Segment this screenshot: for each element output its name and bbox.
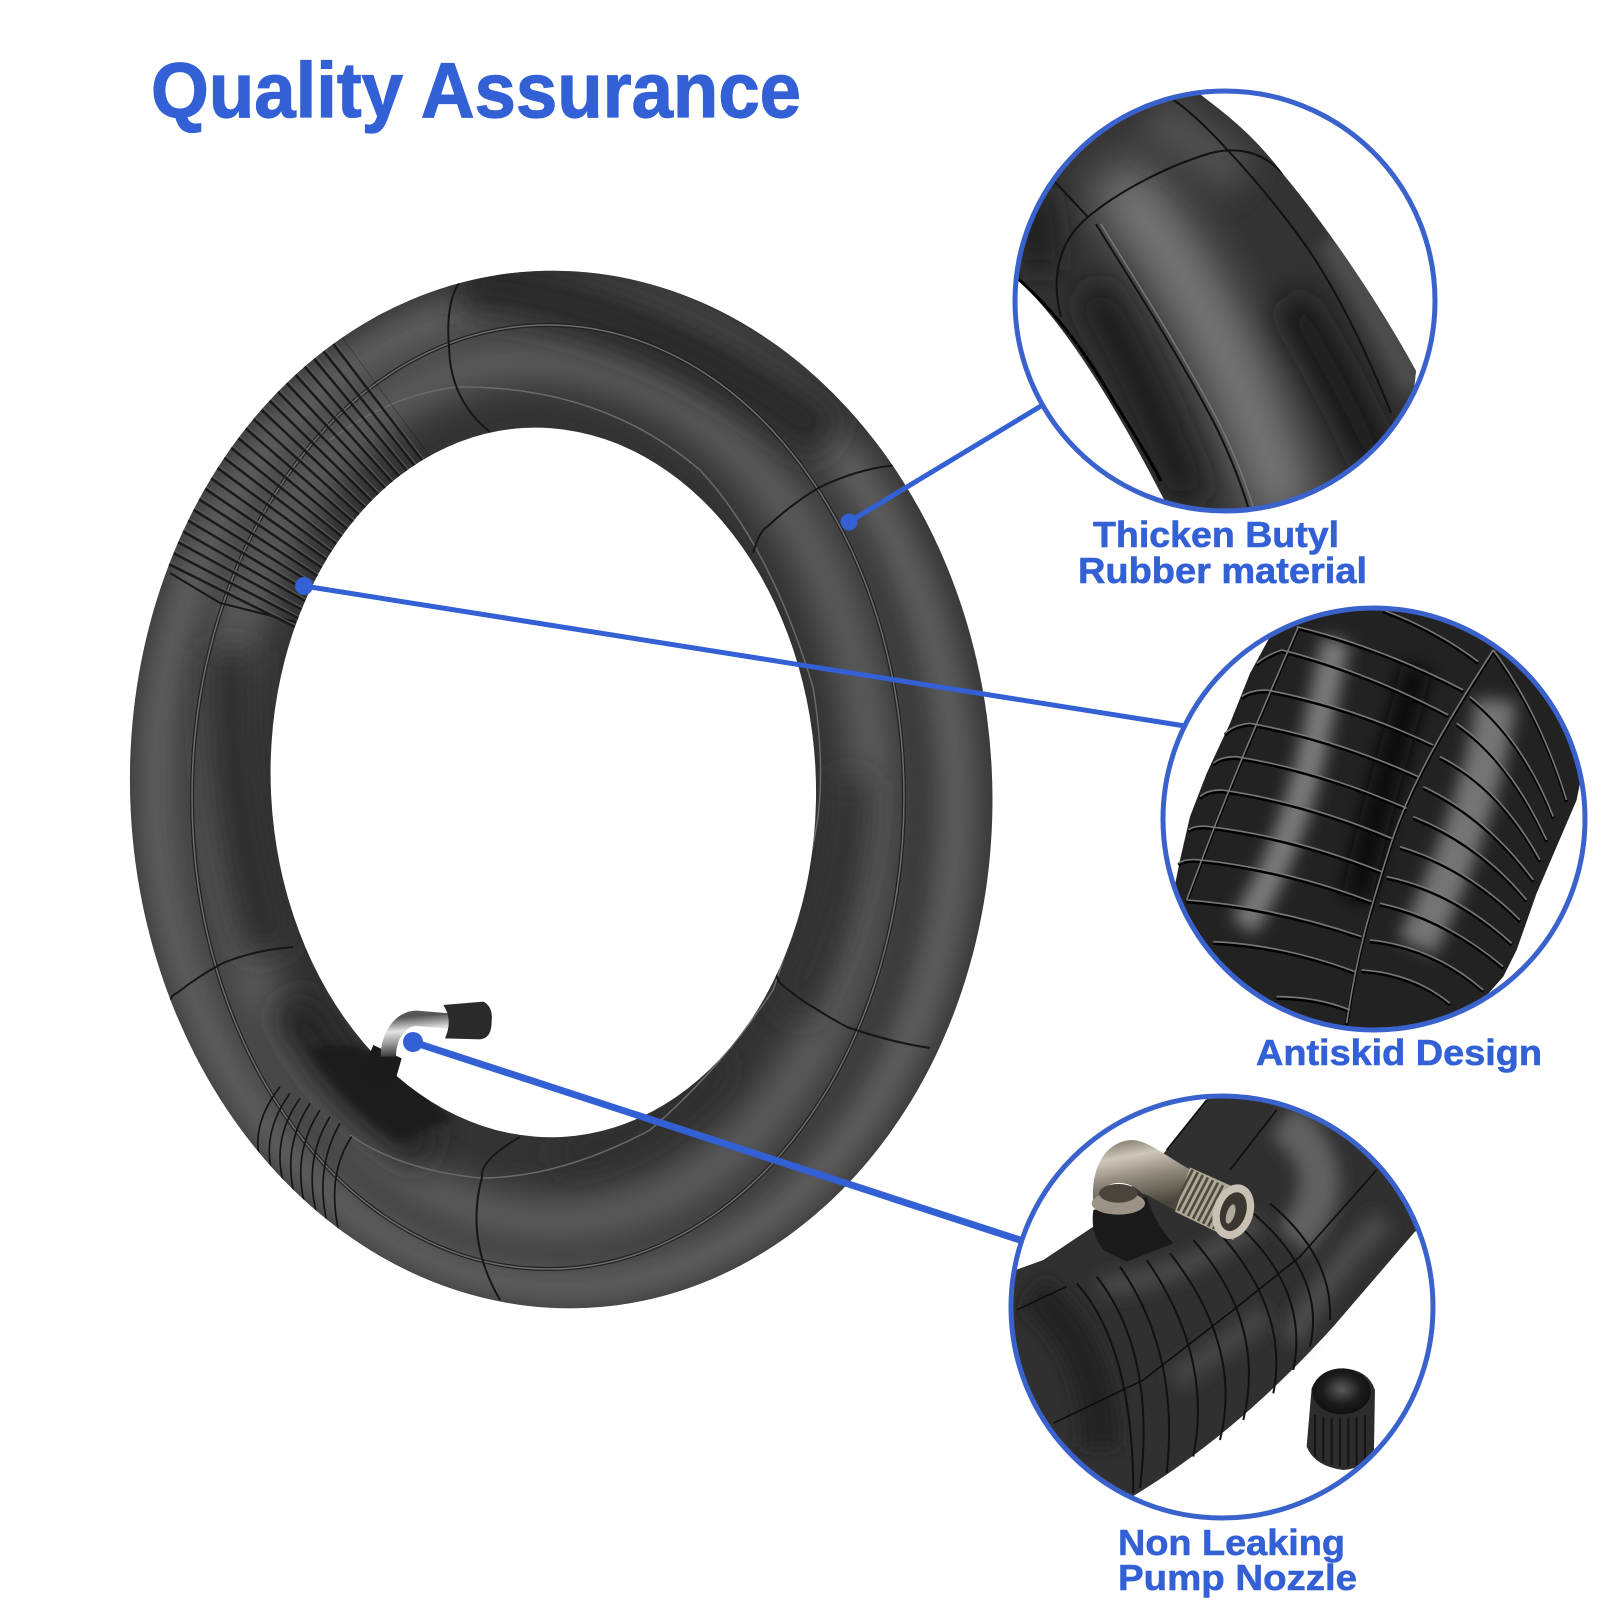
ring outline (1163, 608, 1585, 1030)
lower-left antiskid ribs (258, 1087, 352, 1237)
label: thicken butyl rubber (1078, 514, 1367, 591)
valve threads (1175, 1168, 1234, 1240)
callout dot: antiskid (295, 577, 313, 595)
upper-left antiskid ribs (232, 405, 392, 597)
callout line: rubber material (849, 406, 1041, 522)
valve patch (310, 1044, 450, 1140)
valve cap (1307, 1368, 1375, 1470)
detail circle: antiskid ribs (1163, 597, 1585, 1040)
cross seams (167, 278, 930, 1300)
label: non leaking pump nozzle: Non Leaking (1118, 1522, 1345, 1563)
label: thicken butyl rubber: Thicken Butyl (1093, 514, 1339, 555)
inner tube product photo (100, 250, 1020, 1330)
label: thicken butyl rubber: Rubber material (1078, 550, 1367, 591)
valve base (1093, 1197, 1173, 1262)
valve bend (1093, 1140, 1190, 1212)
zoomed tube (1014, 1098, 1416, 1496)
label: non leaking pump nozzle (1118, 1522, 1357, 1598)
valve stem (360, 1002, 492, 1088)
ring outline (1015, 91, 1435, 511)
callout dot: nozzle (403, 1032, 423, 1052)
callout line: nozzle (413, 1042, 1023, 1241)
title: Quality Assurance (151, 46, 801, 134)
label: non leaking pump nozzle: Pump Nozzle (1118, 1557, 1357, 1598)
label: antiskid design: Antiskid Design (1256, 1032, 1542, 1073)
ring outline (1011, 1096, 1433, 1518)
callout line: antiskid (304, 586, 1185, 726)
callout dot: rubber material (840, 514, 858, 530)
tube body with shading (100, 250, 1020, 1330)
valve mouth (1212, 1184, 1254, 1239)
detail circle: non leaking nozzle (1008, 1094, 1436, 1520)
detail circle: thick butyl rubber (1000, 80, 1450, 520)
seams (192, 325, 904, 1269)
